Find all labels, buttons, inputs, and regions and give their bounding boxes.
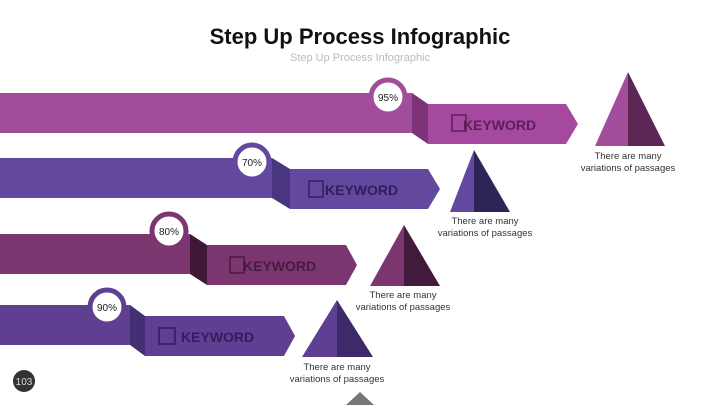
caption: There are many — [303, 362, 371, 373]
page number — [13, 370, 35, 392]
keyword: KEYWORD — [243, 258, 316, 274]
pyramid — [302, 300, 373, 357]
keyword: KEYWORD — [181, 329, 254, 345]
percent circle: 80% — [159, 227, 179, 238]
title: Step Up Process Infographic — [210, 24, 510, 49]
keyword: KEYWORD — [325, 182, 398, 198]
pyramid — [370, 225, 440, 286]
step 3: variations of passages — [356, 302, 451, 313]
subtitle: Step Up Process Infographic — [290, 52, 431, 64]
percent circle — [152, 214, 186, 248]
step 1: variations of passages — [581, 163, 676, 174]
step 3 — [0, 214, 451, 313]
page number: 103 — [16, 377, 33, 388]
percent circle: 70% — [242, 158, 262, 169]
pyramid — [595, 72, 665, 146]
step 4 — [0, 290, 385, 385]
step 2: variations of passages — [438, 228, 533, 239]
caption: There are many — [594, 151, 662, 162]
bottom grey triangle — [346, 392, 374, 405]
percent circle — [235, 145, 269, 179]
step 1 — [0, 72, 676, 174]
pyramid — [450, 150, 510, 212]
percent circle: 95% — [378, 93, 398, 104]
step 2 — [0, 145, 533, 239]
step 4: variations of passages — [290, 374, 385, 385]
percent circle — [371, 80, 405, 114]
percent circle: 90% — [97, 303, 117, 314]
caption: There are many — [369, 290, 437, 301]
keyword: KEYWORD — [463, 117, 536, 133]
percent circle — [90, 290, 124, 324]
caption: There are many — [451, 216, 519, 227]
